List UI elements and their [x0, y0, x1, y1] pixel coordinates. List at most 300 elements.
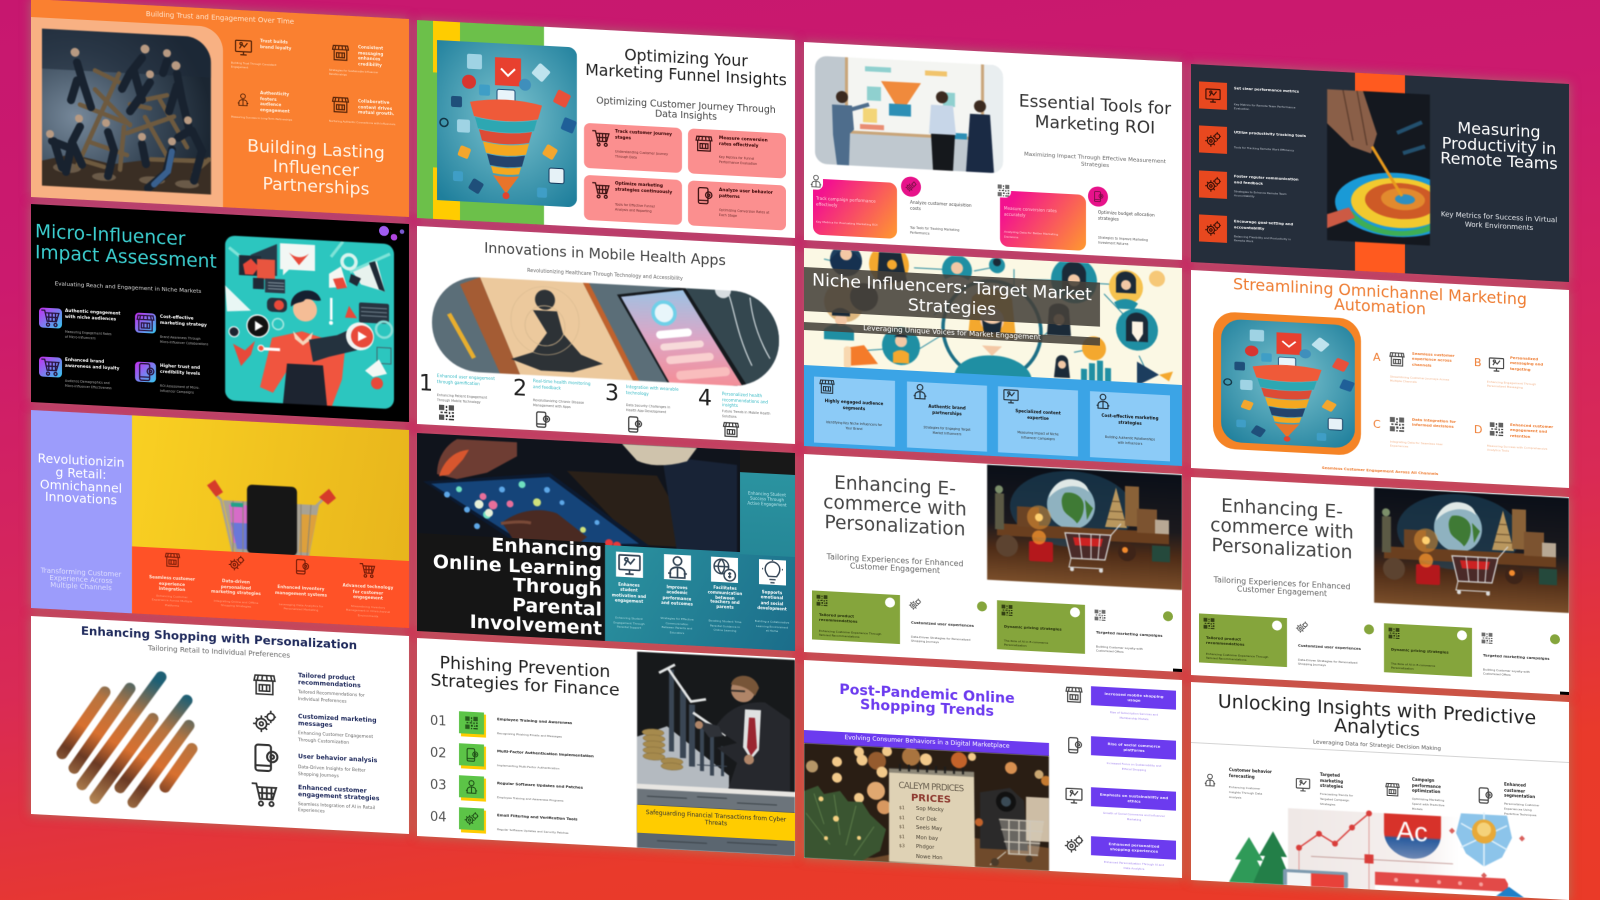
photo: businessman and rising chart [637, 652, 795, 856]
notepad text: $3 [899, 844, 905, 850]
title [1440, 118, 1558, 174]
item: collaborative content: mutual growth. [358, 110, 394, 117]
subtitle: Tailoring Experiences for Enhanced [827, 552, 963, 568]
item: trust builds brand loyalty: Building Trust Through Consistent [231, 61, 276, 67]
card: highly engaged: Highly engaged audience [825, 398, 883, 406]
item: motivation: Engagement Through [613, 620, 645, 625]
card: tailored recommendations: Tailored Recommendations [1206, 656, 1246, 662]
item: communication: communication [708, 589, 742, 596]
purple band [804, 730, 1049, 756]
item D: engagement and [1510, 427, 1547, 434]
item: customized experiences: Data-Driven Strategies for Personalized [911, 635, 970, 642]
card: cost effective: with Influencers [1118, 440, 1142, 446]
item: higher trust: ROI Assessment of Micro- [160, 384, 199, 390]
subtitle [1214, 576, 1350, 600]
item: consistent messaging: enhances [358, 56, 380, 62]
item: mobile shopping [1059, 683, 1179, 730]
corner mark [1560, 691, 1569, 695]
item: communication: parents [716, 604, 734, 610]
item: targeted strategies: Strategies [1320, 801, 1335, 806]
title [839, 683, 1015, 720]
item: enhanced brand awareness: Audience Demographics and [65, 379, 109, 385]
item: sustainability: Marketing [1127, 817, 1141, 821]
black panel [417, 533, 605, 641]
card: optimize strategies [584, 175, 682, 225]
card: dynamic pricing: Personalization [1004, 643, 1027, 648]
slide: Building Lasting Influencer Partnerships [31, 0, 409, 217]
orange stripe [1355, 73, 1405, 273]
item: tailored recommendations: recommendations [298, 679, 360, 689]
item: motivation [609, 551, 652, 641]
item 2 [513, 376, 590, 428]
title: Through [513, 574, 602, 601]
item: productivity tools: Tools for Tracking Remote Work Efficiency [1234, 145, 1294, 152]
item: personalized experiences: shopping experiences [1110, 847, 1158, 854]
item 2: Revolutionizing Chronic Disease [533, 398, 584, 405]
item: enhanced engagement: Seamless Integration of AI in Retail [298, 802, 375, 811]
item: enhanced engagement: engagement strategies [298, 792, 379, 803]
item 3: technology [626, 390, 649, 396]
item: performance: Improves [667, 584, 687, 590]
card: measure conversion rates [688, 128, 786, 179]
item: authenticity fosters engagement: audience [260, 102, 281, 108]
item: data-driven: Integrating Online and Offline [213, 599, 258, 605]
illustration: marketer with megaphone [224, 235, 395, 410]
title [585, 45, 787, 90]
slide: Innovations in Mobile Health Apps [417, 226, 795, 444]
item: targeted strategies [1291, 770, 1369, 809]
card: dynamic pricing: The Role of AI in E-commerce [1391, 661, 1435, 668]
item: regular communication [1199, 170, 1299, 199]
card: track customer journey: Track customer journey [615, 129, 672, 137]
card: measure conversion rates: rates effectively [719, 142, 758, 149]
item: trust builds brand loyalty: Engagement [231, 64, 248, 69]
banner text [646, 810, 786, 832]
item B: Enhancing Engagement Through [1487, 380, 1536, 386]
card: measure conversion rates: Measure conversion rates [1004, 205, 1057, 213]
title: Impact Assessment [35, 242, 216, 273]
item A: channels [1412, 362, 1432, 368]
card: analyze behavior [688, 180, 786, 231]
item: performance: Educators [670, 630, 684, 635]
photo: brush on target [1326, 88, 1431, 246]
title: Strategies [908, 296, 996, 321]
item: user behavior: Shopping Journeys [298, 772, 338, 779]
title [823, 473, 967, 541]
row 04 [427, 806, 627, 841]
item: customer segmentation: Experiences Using [1504, 806, 1532, 812]
notepad text: Cor Dok [916, 816, 937, 823]
title: Marketing ROI [1035, 112, 1155, 138]
item: enhanced brand awareness: awareness and loyalty [65, 364, 119, 372]
item: personalized experiences: Data Analytics [1124, 866, 1144, 871]
card: dynamic pricing: Personalization [1391, 666, 1414, 671]
item: emotional: emotional [761, 594, 783, 600]
title band [804, 266, 1100, 327]
photo: figures climbing wooden structure [41, 28, 212, 196]
item: authentic engagement [39, 308, 120, 340]
item: emotional [752, 558, 795, 649]
card: cost effective: Cost-effective marketing [1101, 413, 1159, 421]
item: trust builds brand loyalty: Trust builds [260, 38, 287, 45]
slide: Measuring Productivity in Remote Teams [1191, 64, 1569, 282]
item: campaign optimization: performance [1412, 782, 1441, 789]
card: specialized expertise: Influencer Campaigns [1021, 435, 1055, 441]
card: dynamic pricing: The Role of AI in E-commerce [1004, 639, 1048, 645]
item C [1371, 414, 1471, 457]
item: sustainability: Emphasis on sustainability and [1100, 792, 1168, 800]
item A: Seamless customer [1412, 351, 1455, 358]
card: dynamic pricing: Dynamic pricing strategies [1004, 624, 1062, 632]
item A [1372, 351, 1455, 384]
item: authenticity fosters engagement: Authenticity [260, 90, 289, 97]
item: targeted campaigns: Building Customer Loyalty with [1483, 667, 1530, 674]
text: optimize budget [1098, 209, 1155, 222]
item: sustainability: Growth of Social Commerce and Influencer [1103, 811, 1165, 818]
row 02 [427, 742, 627, 777]
item: cost effective: Cost-effective [160, 315, 193, 322]
title: Phishing Prevention [440, 653, 610, 682]
card: highly engaged: Identifying Key Niche Influencers for [826, 420, 882, 427]
row 01: Employee Training and Awareness [497, 716, 572, 725]
item: seamless integration: Seamless customer [149, 574, 195, 582]
item: customer behavior: Analysis [1229, 795, 1241, 799]
photo: bokeh lights, plant, cart [804, 743, 1049, 871]
item: communication: Online Learning [714, 628, 736, 633]
item: social commerce: platforms [1123, 747, 1145, 753]
item: customized messages: messages [298, 720, 332, 729]
slide: Essential Tools for Marketing ROI [804, 42, 1182, 260]
slide: Streamlining Omnichannel Marketing Automation [1191, 270, 1569, 488]
item: inventory: Personalized Marketing [283, 607, 318, 613]
title: g Retail: [55, 464, 106, 482]
dark corner [740, 450, 795, 477]
item: customer segmentation: segmentation [1504, 793, 1535, 799]
item: seamless integration: Experience Across Multiple [151, 598, 192, 604]
item: personalized experiences: Enhanced personalized [1109, 841, 1159, 849]
illustration: trees, chart, snowflake [1191, 797, 1569, 900]
card: tailored recommendations [1199, 613, 1287, 667]
item: seamless integration: Platforms [164, 603, 179, 608]
card: tailored recommendations: recommendations [819, 617, 857, 624]
subtitle: Revolutionizing Healthcare Through Technology and Accessibility [527, 269, 683, 282]
card: track campaign performance: Track campaign performance [816, 195, 876, 203]
item 2: 2 [513, 376, 527, 402]
row 04: Email Filtering and Verification Tools [497, 812, 578, 821]
illustration: trees, chart, snowflake: Ac [1396, 816, 1428, 848]
item: emotional: Learning Environment [756, 623, 788, 629]
item: targeted campaigns: Customized Offers [1096, 649, 1124, 654]
title: Essential Tools for [1019, 91, 1171, 119]
title [1218, 692, 1536, 746]
item: performance: Communication [666, 620, 688, 626]
item: mobile shopping: usage [1127, 698, 1141, 703]
item: trust builds brand loyalty [231, 38, 292, 69]
item D: D [1474, 423, 1482, 436]
item: set clear metrics [1199, 81, 1299, 111]
title [430, 654, 620, 701]
title: Parental [512, 594, 602, 620]
item: consistent messaging: Relationships [329, 71, 346, 76]
subtitle: Work Environments [1465, 220, 1533, 232]
item: higher trust [134, 362, 200, 394]
item: cost effective: Brand Awareness Through [160, 335, 200, 341]
item: higher trust: credibility levels [160, 370, 200, 377]
green block [417, 20, 544, 225]
item: social commerce: Rise of social commerce [1108, 741, 1160, 749]
slide: Unlocking Insights with Predictive Analytics [1191, 682, 1569, 900]
title: Innovations [45, 489, 117, 508]
card: authentic partnerships [907, 381, 987, 452]
title: Personalization [824, 512, 965, 541]
item: enhanced brand awareness: Micro-Influencer Effectiveness [65, 384, 111, 390]
card: track campaign performance: Key Metrics for Evaluating Marketing ROI [816, 219, 877, 227]
item: campaign optimization: Optimizing Marketing [1412, 797, 1444, 802]
item: customized messages [248, 707, 398, 745]
title [37, 452, 124, 508]
item: cost effective [134, 312, 208, 346]
item B [1474, 355, 1543, 390]
item: targeted strategies: strategies [1320, 783, 1343, 789]
item C: informed decisions [1412, 422, 1454, 429]
title: Optimizing Your [624, 45, 748, 71]
item: enhanced brand awareness: Enhanced brand [65, 358, 104, 365]
item C: C [1373, 418, 1381, 431]
item: consistent messaging: Strategies for Sustainable Influencer [329, 68, 378, 74]
subtitle: Strategies [1081, 161, 1109, 168]
item: data-driven: Data-driven [222, 578, 250, 585]
item 2: and feedback [533, 384, 561, 391]
item: communication: teachers and [710, 599, 740, 605]
item: targeted strategies: marketing [1320, 777, 1343, 784]
item: authenticity fosters engagement [231, 90, 292, 122]
item: customized experiences: Data-Driven Strategies for Personalized [1298, 657, 1357, 664]
teal callout panel [740, 472, 795, 557]
text: analyze customer acquisition: Analyze customer acquisition [910, 199, 972, 208]
card: optimize strategies: Optimize marketing [615, 181, 663, 189]
band text: Evolving Consumer Behaviors in a Digital Marketplace [844, 734, 1010, 750]
item A: Streamlining Customer Journeys Across [1390, 375, 1449, 382]
item: performance: Strategies for Effective [660, 616, 694, 621]
item: targeted campaigns: Customized Offers [1483, 672, 1511, 677]
blue band [804, 365, 1182, 466]
rule [1191, 742, 1569, 763]
title [812, 270, 1092, 321]
illustration: phone in shopping cart [201, 469, 346, 559]
item: enhanced brand awareness [39, 356, 120, 390]
item: collaborative content [329, 96, 396, 126]
item: authentic engagement: with niche audiences [65, 314, 116, 322]
item: data-driven: marketing strategies [211, 589, 260, 596]
card: specialized expertise: Specialized content [1015, 408, 1061, 416]
subtitle: Optimizing Customer Journey Through [596, 95, 776, 116]
title: Online Learning [433, 550, 602, 581]
item: tailored recommendations: Tailored product [298, 672, 355, 682]
card: dynamic pricing [997, 600, 1085, 654]
title [433, 533, 602, 639]
item D [1473, 419, 1568, 462]
item A: Multiple Channels [1390, 379, 1417, 384]
item 4: Solutions [722, 414, 737, 419]
item: enhanced engagement: Enhanced customer [298, 784, 366, 795]
slide: Optimizing Your Marketing Funnel Insights [417, 20, 795, 238]
funnel illustration [436, 40, 578, 208]
subtitle: Tailoring Experiences for Enhanced [1214, 575, 1350, 591]
item 3: Data Security Challenges in [626, 403, 670, 409]
item: seamless integration: integration [158, 586, 185, 592]
item: communication: Parental Guidance in [710, 623, 740, 628]
item: goal setting: Balancing Flexibility and Productivity in [1234, 234, 1291, 241]
item: user behavior: Data-Driven Insights for Better [298, 765, 365, 774]
item: customized experiences [1291, 618, 1381, 673]
subtitle: Maximizing Impact Through Effective Measurement [1024, 151, 1166, 165]
subtitle: Evaluating Reach and Engagement in Niche Markets [54, 281, 201, 295]
item: social commerce [1059, 733, 1179, 780]
card: tailored recommendations: Enhancing Customer Experience Through [1206, 651, 1268, 659]
item: cost effective: Micro-Influencer Collaborations [160, 340, 208, 346]
item: higher trust: Higher trust and [160, 364, 200, 371]
item: customized experiences [904, 595, 994, 650]
item: inventory [270, 557, 332, 622]
subtitle: Key Metrics for Success in Virtual [1441, 210, 1557, 224]
text: optimize budget: strategies [1098, 215, 1119, 221]
text: top tools: Top Tools for Tracking Marketing [910, 225, 959, 232]
title: Partnerships [262, 174, 369, 200]
item: campaign optimization: Models [1412, 806, 1423, 811]
item: advanced technology: Streamlining Inventory [350, 604, 385, 610]
item: personalized experiences: Enhanced Personalization Through AI and [1104, 860, 1164, 867]
footer: Seamless Customer Engagement Across All Channels [1322, 465, 1438, 476]
item: authenticity fosters engagement: fosters [260, 96, 276, 102]
item: advanced technology: Advanced technology [342, 582, 393, 590]
item: customer segmentation [1475, 780, 1560, 823]
title: Post-Pandemic Online [839, 682, 1015, 707]
card: measure conversion rates: Decisions [1004, 234, 1018, 239]
card: optimize strategies: Tools for Effective Funnel [615, 202, 655, 209]
title: Omnichannel [40, 476, 122, 495]
item: advanced technology: Management in Omnichannel [345, 608, 390, 614]
item: consistent messaging: Consistent [358, 44, 383, 51]
item: campaign optimization: Campaign [1412, 777, 1434, 783]
item: consistent messaging: messaging [358, 50, 383, 56]
row 02: Multi-Factor Authentication Implementation [497, 748, 594, 758]
card: specialized expertise: expertise [1027, 414, 1049, 421]
item C: Experiences [1390, 444, 1408, 449]
item: seamless integration: Enhancing Customer [156, 594, 187, 599]
item: customer behavior: Customer behavior [1229, 767, 1272, 774]
text: top tools: Performance [910, 230, 930, 235]
subtitle: Tailoring Retail to Individual Preferences [148, 643, 290, 660]
callout text: Active Engagement [747, 500, 787, 507]
item: authentic engagement: of Micro-Influencers [65, 335, 95, 340]
item 3: Health App Development [626, 408, 666, 414]
callout text: Success Through [750, 495, 784, 502]
item: customer segmentation: Personalizing Customer [1504, 802, 1539, 807]
item: collaborative content: content drives [358, 104, 392, 111]
text: top tools [910, 225, 960, 235]
banner text: Threats [705, 820, 727, 827]
item: emotional: Supports [762, 589, 782, 595]
subtitle: Data Insights [655, 108, 717, 123]
subtitle: Experience Across [49, 574, 112, 586]
item: customized experiences: Shopping Journeys [911, 639, 939, 645]
title: Enhancing Shopping with Personalization [80, 624, 357, 652]
title [247, 136, 384, 200]
item: performance: academic [666, 589, 688, 595]
lavender panel [31, 410, 132, 613]
title: Enhancing [491, 534, 602, 561]
card: authentic partnerships: partnerships [932, 409, 962, 416]
item: targeted campaigns: Targeted marketing campaigns [1096, 629, 1163, 638]
item: performance [657, 553, 700, 644]
item: customized messages: Customized marketing [298, 713, 376, 724]
item: enhanced engagement: Experiences [298, 808, 324, 815]
card: analyze behavior: Each Stage [719, 212, 737, 217]
title [35, 221, 217, 273]
item 2: Real-time health monitoring [533, 378, 590, 386]
item: motivation: Enhances [618, 581, 640, 587]
item: data-driven: personalized [220, 584, 251, 590]
item: motivation: Enhancing Student [615, 615, 643, 621]
notepad text [889, 775, 975, 867]
subtitle: Transforming Customer [40, 567, 121, 579]
item: inventory: Enhanced inventory [277, 584, 324, 592]
title: Personalization [1212, 535, 1352, 563]
item: social commerce: Ethical Shopping [1122, 766, 1146, 772]
notepad text: $1 [899, 816, 905, 821]
slide: Enhancing Online Learning Through Parental Involvement [417, 433, 795, 651]
item: targeted campaigns [1476, 628, 1566, 683]
notepad text: Nowe Hon [916, 854, 942, 861]
card: cost effective: strategies [1118, 419, 1142, 425]
item: mobile shopping: Rise of Subscription Services and [1110, 710, 1158, 717]
item: targeted campaigns [1089, 605, 1179, 660]
item B: messaging and [1510, 360, 1543, 367]
item: user behavior: User behavior analysis [298, 753, 377, 764]
notepad text: PRICES [911, 793, 951, 806]
banner text: Safeguarding Financial Transactions from Cyber [646, 810, 786, 824]
notepad text: Phdgor [916, 844, 934, 851]
item: sustainability [1059, 784, 1179, 831]
item: inventory: management systems [275, 590, 327, 597]
photo: hand on glowing tablet [417, 433, 795, 563]
item: emotional: Building a Collaborative [755, 619, 789, 624]
row 01: 01 [430, 714, 447, 730]
card: track customer journey: Through Data [615, 154, 637, 159]
title: commerce with [1210, 515, 1354, 543]
orange panel [132, 546, 409, 628]
row 04: 04 [430, 810, 447, 826]
photo: team at whiteboard [814, 56, 1004, 174]
item: social commerce: Increased Focus on Sustainability and [1107, 761, 1161, 768]
item A: experience across [1412, 356, 1452, 363]
item: motivation: Parental Support [617, 624, 641, 630]
title: Revolutionizin [37, 450, 124, 470]
title: Streamlining Omnichannel Marketing [1233, 274, 1527, 309]
item: productivity tools: Utilize productivity tracking tools [1234, 129, 1306, 138]
decorative dots: purple [378, 226, 404, 241]
item: customer behavior [1203, 766, 1281, 805]
item: set clear metrics: Set clear performance metrics [1234, 85, 1299, 94]
card: dynamic pricing: Dynamic pricing strategies [1391, 646, 1449, 654]
corner mark [1173, 669, 1182, 672]
item: advanced technology: Environments [357, 613, 378, 618]
item: customized experiences: Customized user experiences [1298, 642, 1361, 651]
title: Remote Teams [1440, 148, 1558, 174]
text: strategies to improve [1098, 235, 1148, 246]
item: customer segmentation: customer [1504, 787, 1525, 793]
card: tailored recommendations: Enhancing Customer Experience Through [819, 629, 881, 636]
